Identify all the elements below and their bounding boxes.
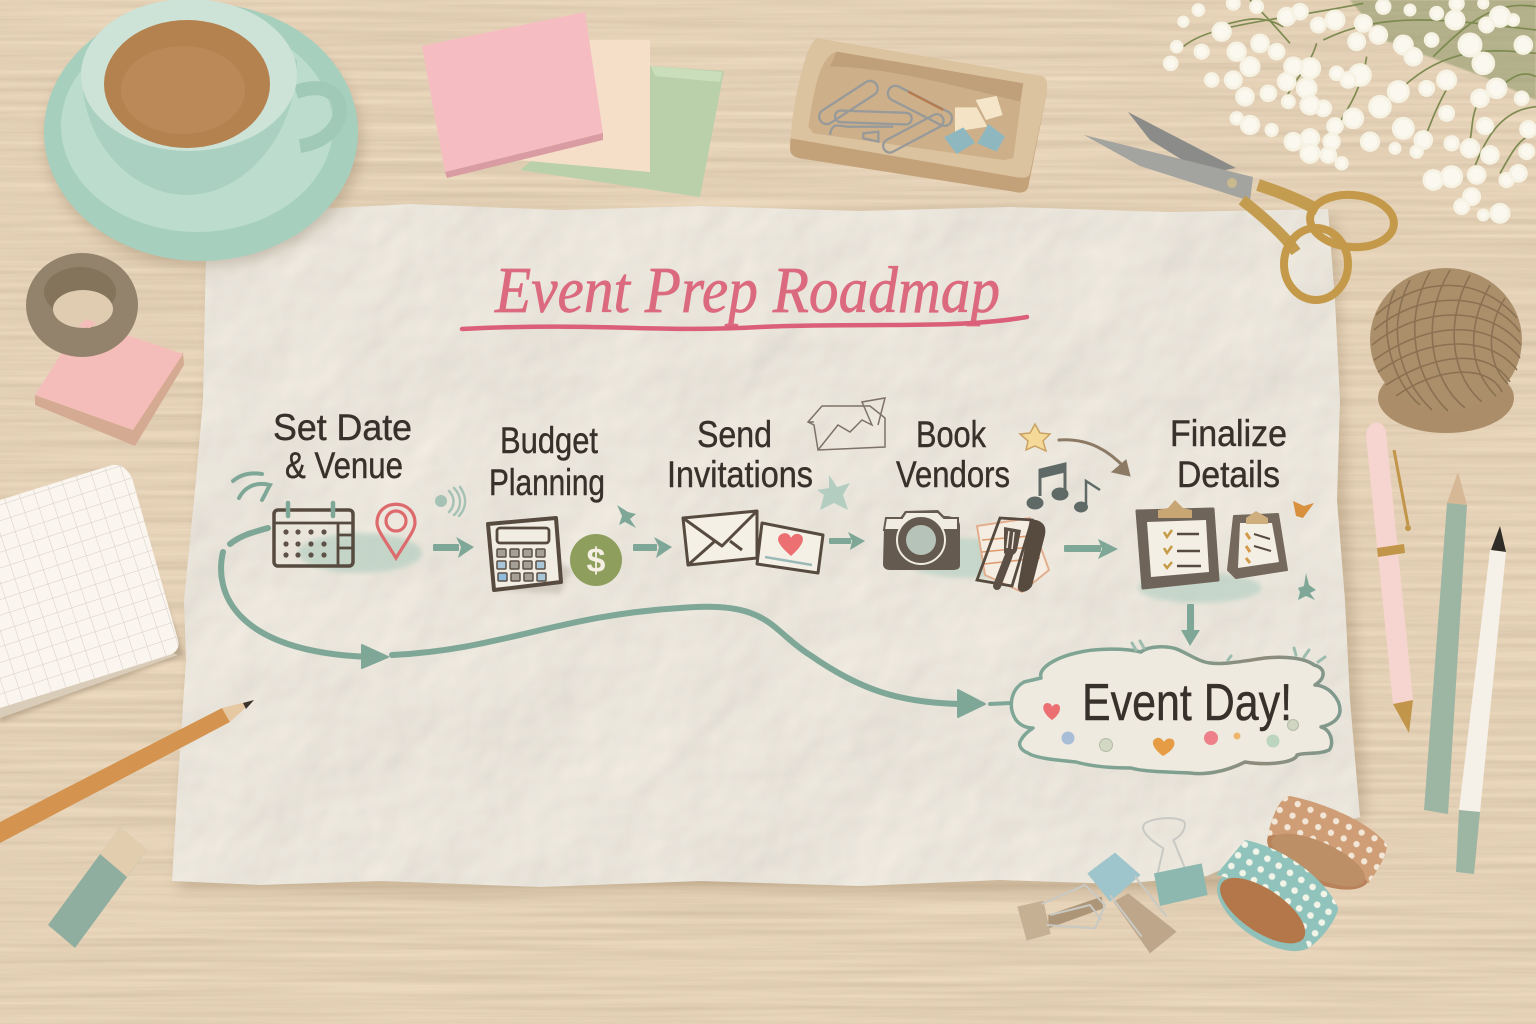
binder clip: teal — [1143, 818, 1208, 906]
heading: send invitations: Send — [697, 414, 772, 455]
heading: budget planning: Planning — [489, 462, 605, 503]
confetti — [1043, 703, 1298, 756]
dollar coin icon: $ — [587, 542, 606, 580]
heading: set date & venue: & Venue — [285, 445, 403, 486]
binder clip: tan — [1017, 885, 1105, 941]
grid notebook — [0, 465, 184, 722]
step 1: set date and venue — [233, 407, 465, 573]
heading: send invitations: Invitations — [667, 454, 813, 495]
step 4: book vendors — [883, 414, 1130, 592]
arrow: invitations to vendors — [830, 532, 865, 550]
orange heart — [1293, 501, 1314, 518]
heading: finalize details: Finalize — [1170, 413, 1287, 454]
event day cloud callout — [1011, 641, 1340, 774]
green pencil — [1424, 472, 1467, 814]
step 2: budget planning — [488, 420, 636, 594]
heart card icon — [757, 523, 823, 573]
camera icon — [883, 510, 1027, 578]
sketched open box — [808, 398, 885, 450]
arrow: budget to invitations — [634, 537, 672, 558]
menu book with fork icon — [977, 518, 1049, 592]
washi tape: teal — [1204, 840, 1338, 967]
binder clip: blue and tan — [1087, 853, 1177, 953]
star — [1020, 424, 1050, 451]
pink pen — [1366, 423, 1413, 733]
baby's breath flowers — [1164, 0, 1536, 222]
envelope icon — [683, 511, 757, 565]
heading: book vendors: Vendors — [896, 454, 1010, 495]
twine ball on coaster — [1370, 268, 1522, 433]
title: Event Prep Roadmap — [494, 254, 1000, 327]
wooden tray with clips — [790, 38, 1047, 193]
heading: book vendors — [896, 414, 1010, 495]
large clipboard icon — [1137, 500, 1262, 603]
teal star — [1298, 573, 1316, 600]
pink sticky pad — [35, 320, 184, 446]
washi tape: peach — [1258, 796, 1387, 903]
music notes — [1027, 464, 1100, 512]
arrow: venue to budget — [434, 537, 474, 558]
heading: set date & venue: Set Date — [273, 407, 412, 448]
paper sheet shadow — [178, 214, 1366, 892]
scissors — [1084, 112, 1396, 300]
white pen — [1456, 526, 1506, 874]
dollar coin icon — [570, 534, 622, 586]
arrow: vendors to finalize — [1065, 539, 1118, 559]
heading: budget planning: Budget — [500, 420, 599, 461]
curved arrow to finalize — [1059, 440, 1130, 476]
heading: book vendors: Book — [916, 414, 986, 455]
step 3: send invitations — [667, 398, 885, 573]
saucer and coffee cup — [44, 0, 362, 266]
sparkle strokes — [233, 473, 270, 500]
arrow: finalize down to event day — [1181, 605, 1200, 646]
heading: send invitations — [667, 414, 813, 495]
sound waves — [435, 487, 465, 516]
step 5: finalize details — [1137, 413, 1316, 603]
crumpled paper sheet — [172, 204, 1360, 887]
wooden pencil — [0, 700, 254, 843]
calculator icon — [488, 518, 572, 594]
heading: finalize details — [1170, 413, 1287, 495]
sticky notes stack — [422, 12, 724, 197]
washi tape and binder clips — [1017, 796, 1387, 967]
teal sparkle — [617, 505, 636, 528]
faded star — [817, 475, 850, 510]
heading: budget planning — [489, 420, 605, 503]
heading: set date & venue — [273, 407, 412, 486]
route from calendar to event day — [221, 528, 1011, 717]
calendar icon — [274, 503, 422, 573]
green eraser — [48, 827, 147, 948]
sparkle marks — [1132, 641, 1325, 662]
small clipboard icon — [1228, 511, 1287, 578]
masking tape roll — [26, 253, 138, 357]
event day text: Event Day! — [1082, 674, 1292, 732]
heading: finalize details: Details — [1177, 454, 1280, 495]
location pin icon — [377, 504, 415, 558]
